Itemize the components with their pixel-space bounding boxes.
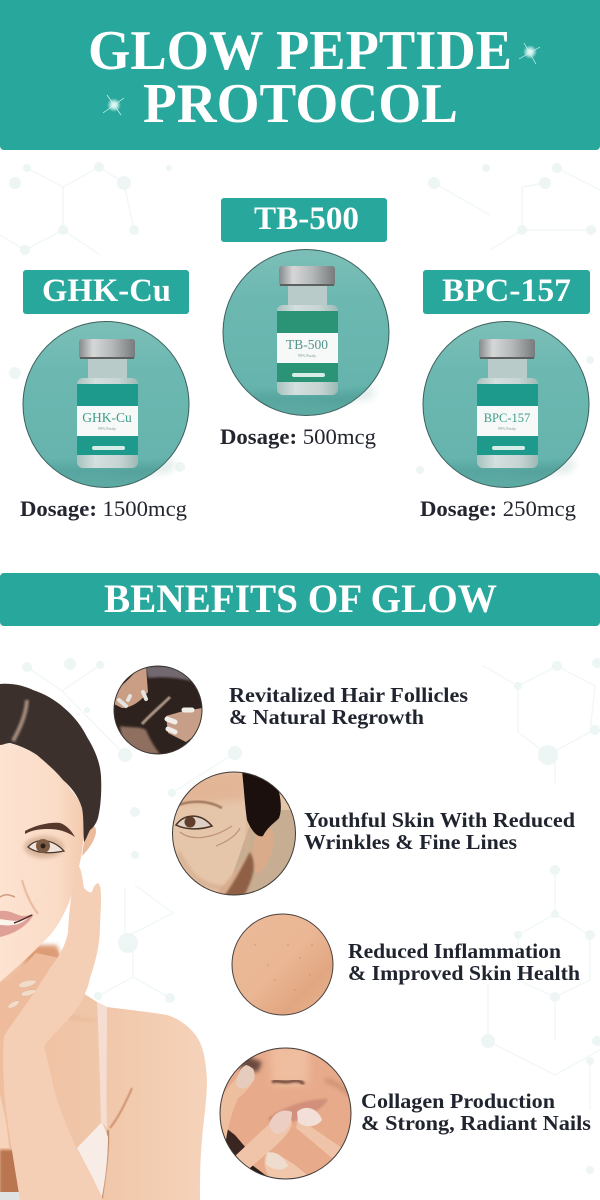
neck shadow — [18, 945, 70, 1010]
text: collagen benefit: Collagen Production — [361, 1089, 555, 1113]
shoulder, neck and chest — [0, 950, 207, 1200]
eye — [24, 836, 64, 858]
text: skin benefit — [304, 808, 575, 854]
top fabric — [77, 1122, 108, 1197]
far side arm sliver — [0, 1095, 9, 1148]
eyebrow — [25, 823, 75, 837]
ear — [82, 825, 96, 856]
dosage: BPC-157: Dosage: 250mcg — [420, 496, 576, 521]
text: inflammation benefit: Reduced Inflammation — [348, 939, 561, 963]
text: hair benefit: & Natural Regrowth — [229, 705, 424, 729]
strap — [97, 1002, 107, 1128]
vial photo: BPC-157 — [423, 322, 589, 488]
label: GHK-Cu — [23, 270, 189, 314]
sparkle right — [519, 43, 540, 64]
label: TB-500: TB-500 — [254, 201, 359, 237]
text: hair benefit: Revitalized Hair Follicles — [229, 683, 468, 707]
smile crease — [22, 880, 38, 914]
text: skin benefit: Youthful Skin With Reduced — [304, 808, 575, 832]
sparkle left — [103, 95, 124, 115]
vial photo: TB-500: 99% Purity — [298, 353, 316, 358]
photo: woman touching her face — [0, 684, 207, 1200]
title text line 2: PROTOCOL — [143, 73, 458, 135]
hand and forearm — [3, 865, 102, 1200]
nose — [0, 895, 15, 897]
label: BPC-157: BPC-157 — [442, 273, 571, 309]
vial photo: BPC-157: 99% Purity — [498, 426, 516, 431]
hair — [0, 684, 101, 842]
text: inflammation benefit — [348, 939, 580, 985]
label: BPC-157 — [423, 270, 590, 314]
vial photo: BPC-157: BPC-157 — [484, 411, 530, 425]
label: GHK-Cu: GHK-Cu — [42, 273, 171, 309]
banner: benefits of glow: BENEFITS OF GLOW — [104, 576, 497, 621]
centre finger — [236, 1120, 292, 1168]
shadow beneath left arm — [0, 1150, 24, 1195]
vial photo: TB-500 — [223, 250, 389, 416]
face — [0, 743, 84, 982]
photo: nails and lips — [220, 1045, 352, 1180]
photo: wrinkles around eye — [172, 770, 296, 896]
text: skin benefit: Wrinkles & Fine Lines — [304, 830, 517, 854]
left finger — [220, 1067, 254, 1140]
title text line 1: GLOW PEPTIDE — [88, 20, 512, 82]
underarm crease — [110, 1088, 132, 1128]
text: inflammation benefit: & Improved Skin Health — [348, 961, 580, 985]
dosage: TB-500: Dosage: 500mcg — [220, 424, 376, 449]
title banner — [0, 0, 600, 150]
lips and teeth — [0, 911, 34, 937]
text: hair benefit — [229, 683, 468, 729]
dosage: GHK-Cu: Dosage: 1500mcg — [20, 496, 187, 521]
label: TB-500 — [221, 198, 387, 242]
vial photo: GHK-Cu: GHK-Cu — [82, 410, 132, 425]
banner: benefits of glow — [0, 573, 600, 626]
vial photo: GHK-Cu: 99% Purity — [98, 426, 116, 431]
bottom finger — [264, 1152, 306, 1178]
right finger — [296, 1119, 341, 1158]
text: collagen benefit — [361, 1089, 591, 1135]
background: hexagon molecule pattern — [0, 167, 600, 1110]
text: collagen benefit: & Strong, Radiant Nails — [361, 1111, 591, 1135]
hand fingers under chin — [0, 953, 60, 1040]
vial photo: GHK-Cu — [23, 322, 189, 488]
hair part — [13, 700, 27, 741]
vial photo: TB-500: TB-500 — [286, 337, 328, 352]
photo: skin texture — [232, 914, 333, 1015]
photo: hair follicles — [114, 666, 202, 754]
